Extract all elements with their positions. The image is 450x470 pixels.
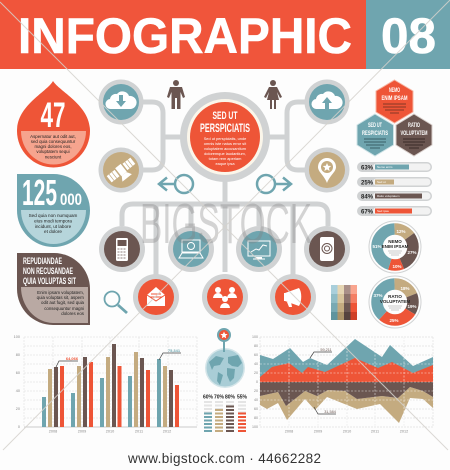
donut chart 1 bbox=[369, 221, 421, 273]
progress bars: 84% bbox=[361, 194, 374, 200]
progress bars: Ratio voluptatem bbox=[377, 194, 400, 198]
panel: 125 000: Sed quia non numquam bbox=[29, 213, 78, 218]
hexagon: red: ENIM IPSAM bbox=[382, 95, 408, 102]
issue number: 08 bbox=[381, 8, 436, 64]
hexagon: brown: RATIO bbox=[408, 122, 420, 129]
icon: smartphone bbox=[304, 226, 350, 272]
panel: 125 000: et dolore bbox=[44, 229, 62, 234]
bar chart: 40 bbox=[16, 389, 20, 393]
mini stacked percent bars: 70% bbox=[214, 394, 225, 400]
watermark text: BIGSTOCK bbox=[140, 192, 312, 256]
area chart: 80 bbox=[254, 416, 258, 420]
panel: 125 000: 000 bbox=[60, 190, 82, 209]
donut chart 1: 51% bbox=[372, 244, 382, 249]
icon: monitor chart bbox=[236, 226, 282, 272]
icon: man bbox=[167, 80, 185, 109]
panel: drop 47 bbox=[17, 81, 90, 167]
panel: repudiandae: Enim ipsam voluptatem, bbox=[37, 290, 84, 295]
area chart: 59,211 bbox=[320, 348, 332, 352]
bar chart bbox=[14, 335, 197, 434]
panel: repudiandae: QUIA VOLUPTAS SIT bbox=[23, 276, 76, 286]
icon: cloud download bbox=[98, 80, 144, 124]
panel: 125 000 bbox=[17, 172, 90, 247]
area chart: 100 bbox=[252, 425, 258, 429]
area chart: 20 bbox=[254, 371, 258, 375]
donut chart 2: RATIO bbox=[388, 294, 402, 299]
bar chart: 80 bbox=[16, 353, 20, 357]
donut chart 1: ENIM IPSAM bbox=[382, 244, 409, 249]
panel: 125 000: eius modi tempora bbox=[34, 218, 72, 224]
donut chart 1: 12% bbox=[396, 229, 406, 234]
area chart: 31,584 bbox=[324, 410, 336, 414]
panel: repudiandae bbox=[17, 253, 90, 325]
donut chart 1: 27% bbox=[407, 250, 417, 255]
area chart: 2009 bbox=[314, 430, 322, 434]
hexagon: red: NEMO bbox=[389, 87, 400, 94]
icon: woman bbox=[264, 80, 282, 109]
arrow right bbox=[257, 175, 291, 193]
bar chart: 2011 bbox=[135, 430, 143, 434]
area chart: 2008 bbox=[285, 430, 293, 434]
area chart: 0 bbox=[256, 380, 258, 384]
progress bars: Sed ut bbox=[377, 180, 386, 184]
hexagon: brown: VOLUPTATEM bbox=[400, 130, 428, 137]
hexagon: teal bbox=[357, 114, 394, 156]
area chart: 80 bbox=[254, 344, 258, 348]
area chart: 2010 bbox=[343, 430, 351, 434]
panel: drop 47: nesciunt bbox=[45, 154, 62, 160]
panel: drop 47: voluptatem sequi bbox=[36, 149, 70, 154]
area chart: 60 bbox=[254, 353, 258, 357]
progress bars bbox=[357, 162, 432, 216]
arrow left bbox=[159, 175, 193, 193]
bar chart: 2009 bbox=[78, 430, 86, 434]
progress bars: 63% bbox=[361, 166, 374, 172]
globe with pin bbox=[205, 328, 245, 388]
panel: repudiandae: consequuntur magni bbox=[44, 306, 84, 311]
panel: drop 47: Aspernatur aut odit aut, bbox=[30, 134, 76, 139]
icon: people bbox=[202, 274, 248, 320]
mini stacked percent bars bbox=[203, 394, 248, 431]
panel: drop 47: magni dolores eos, bbox=[34, 144, 72, 149]
progress bars: Sed ipsa bbox=[377, 209, 389, 213]
panel: repudiandae: dolores eos bbox=[61, 311, 85, 316]
panel: drop 47: 47 bbox=[40, 96, 66, 135]
icon: keypad phone bbox=[99, 226, 145, 272]
bar chart: 100 bbox=[14, 335, 20, 339]
area chart bbox=[252, 335, 433, 434]
donut chart 1: 10% bbox=[392, 264, 402, 269]
central circle: SED UT bbox=[212, 110, 238, 122]
progress bars: Nemo enim bbox=[377, 165, 393, 169]
central circle: totam rem aperiam bbox=[209, 156, 241, 161]
donut chart 1: NEMO bbox=[388, 239, 402, 244]
bar chart: 20 bbox=[16, 407, 20, 411]
donut chart 2: 37% bbox=[373, 293, 383, 298]
bar chart: 60 bbox=[16, 371, 20, 375]
bar chart: 64,066 bbox=[66, 356, 79, 361]
area chart: 20 bbox=[254, 389, 258, 393]
central circle bbox=[180, 92, 270, 182]
bar chart: 2008 bbox=[49, 430, 57, 434]
donut chart 2 bbox=[369, 276, 421, 328]
bar chart: 2010 bbox=[106, 430, 114, 434]
central circle: doloremque laudantium, bbox=[204, 151, 246, 156]
progress bars: 25% bbox=[361, 180, 374, 186]
hexagon: teal: RESPICIATIS bbox=[362, 130, 388, 137]
panel: repudiandae: odit aut fugit, sed quia bbox=[41, 300, 85, 305]
panel: repudiandae: REPUDIANDAE bbox=[23, 256, 62, 266]
area chart: 60 bbox=[254, 407, 258, 411]
icon: magnifier bbox=[104, 292, 127, 313]
icon: cloud upload bbox=[304, 80, 350, 124]
panel: repudiandae: NON RECUSANDAE bbox=[23, 266, 73, 276]
area chart: 40 bbox=[254, 362, 258, 366]
panel: 125 000: 125 bbox=[22, 172, 57, 213]
central circle: Sed ut perspiciatis, unde bbox=[204, 136, 246, 141]
donut chart 2: 18% bbox=[400, 286, 410, 291]
bar chart: 2012 bbox=[163, 430, 171, 434]
donut chart 2: 19% bbox=[407, 304, 417, 309]
icon: map pin bbox=[304, 148, 350, 192]
header band bbox=[0, 0, 450, 69]
area chart: 100 bbox=[252, 335, 258, 339]
stock footer: www.bigstock.com · 44662282 bbox=[127, 451, 321, 466]
mini stacked percent bars: 60% bbox=[203, 394, 214, 400]
connectors bbox=[122, 102, 328, 275]
panel: 125 000: incidunt, ut labore bbox=[35, 224, 72, 229]
palette swatches bbox=[331, 285, 357, 320]
bar chart: 75,341 bbox=[168, 348, 181, 353]
panel: repudiandae: quia voluptas sit, aspern bbox=[37, 295, 85, 300]
donut chart 2: VOLUPTATEM bbox=[380, 299, 410, 304]
icon: megaphone bbox=[270, 274, 316, 320]
hexagon: red bbox=[376, 80, 413, 123]
panel: drop 47: sed quia consequuntur bbox=[31, 139, 76, 144]
central circle: voluptatem accusantium bbox=[204, 146, 246, 151]
progress bars: 67% bbox=[361, 210, 374, 216]
central circle: eaque ipsa bbox=[215, 161, 235, 166]
area chart: 2011 bbox=[371, 430, 379, 434]
area chart: 2012 bbox=[400, 430, 408, 434]
title: INFOGRAPHIC bbox=[18, 8, 352, 64]
icon: satellite bbox=[98, 148, 144, 192]
icon: envelope bbox=[133, 274, 179, 320]
central circle: omnis iste natus error sit bbox=[204, 141, 247, 146]
central circle: PERSPICIATIS bbox=[200, 123, 250, 135]
hexagon: brown bbox=[396, 114, 432, 156]
hexagon: teal: SED UT bbox=[368, 122, 382, 129]
donut chart 2: 25% bbox=[389, 318, 399, 323]
area chart: 40 bbox=[254, 398, 258, 402]
bar chart: 0 bbox=[18, 425, 20, 429]
icon: laptop bbox=[168, 226, 214, 272]
mini stacked percent bars: 55% bbox=[237, 394, 248, 400]
mini stacked percent bars: 80% bbox=[225, 394, 236, 400]
